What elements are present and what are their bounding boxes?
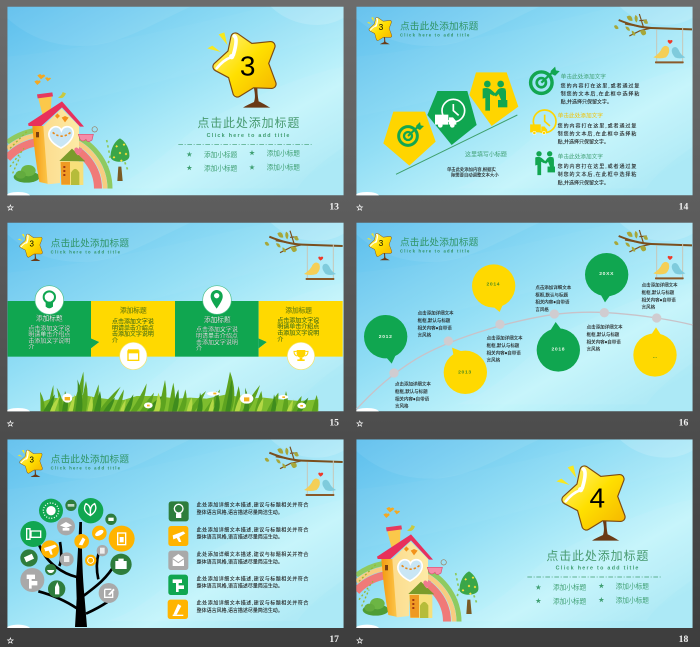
panel: slide 16 timeline	[355, 223, 693, 429]
icon: calendar	[120, 342, 147, 370]
caption: 单击此处添加内容,根据实	[447, 166, 496, 173]
bubble: 20XX	[585, 253, 628, 302]
footer	[7, 417, 339, 429]
caption: 这里填写小标题	[465, 150, 507, 158]
heading subtitle: Click here to add title	[400, 249, 470, 254]
decoration: branch and swing birds	[614, 230, 692, 279]
illustration: house with rainbow	[356, 507, 478, 622]
row text 3: 此处添加详细文本描述,建议与标题相关并符合	[197, 551, 308, 558]
text block 2: 框框,默认与标题	[418, 317, 451, 324]
column: green 3: 击添加文字说明	[196, 338, 238, 346]
item: target	[531, 67, 639, 105]
bubble: 2018	[537, 322, 580, 372]
sub-headings list: 添加小标题	[616, 581, 649, 590]
sub-headings list: 添加小标题	[553, 583, 587, 592]
item: delivery: 制您的文本后,在此框中选择粘	[558, 130, 636, 137]
decoration: branch and swing birds	[265, 231, 343, 280]
heading subtitle: Click here to add title	[51, 249, 121, 254]
sub-headings list: 添加小标题	[553, 596, 587, 605]
row text 4: 此处添加详细文本描述,建议与标题相关并符合	[197, 575, 308, 582]
footer: 17	[329, 634, 339, 645]
footer: ☆	[7, 635, 14, 645]
sub-headings list: ★	[598, 597, 604, 604]
pentagon: handshake	[469, 72, 518, 126]
sub-headings list	[186, 148, 300, 172]
column: green 3: 添加标题	[204, 315, 231, 324]
panel: slide 14 three pentagons	[355, 7, 693, 213]
timeline nodes	[389, 308, 661, 378]
bubble: 2014	[472, 264, 515, 312]
item: handshake: 贴,并选择只保留文字。	[558, 179, 609, 186]
slide 16 background	[355, 223, 693, 416]
sub-headings list	[535, 581, 649, 605]
column: green 1: 介	[28, 344, 34, 351]
item: delivery	[530, 110, 636, 145]
column: yellow 2: 介	[112, 337, 118, 344]
item: target: 您的内容打在这里,或者通过复	[561, 82, 639, 89]
row text 4	[197, 575, 308, 590]
text block 4: 相关内容●自带语	[535, 299, 570, 306]
header number: 3	[379, 239, 384, 248]
footer: ☆	[356, 203, 363, 213]
divider	[527, 576, 662, 578]
bubble: 20XX: 20XX	[599, 271, 614, 277]
panel: slide 17 icon tree	[6, 439, 344, 645]
icon: star tree	[556, 465, 621, 541]
row text 2: 整体语言风格,语言描述尽量简洁生动。	[197, 534, 283, 541]
column: yellow 4	[259, 301, 343, 357]
sub-headings list: ★	[535, 584, 541, 591]
text block 2: 相关内容●自带语	[418, 324, 452, 331]
column: green 1: 明请单击介绍点	[28, 331, 70, 339]
icon: star tree	[207, 32, 272, 108]
tree icon circles	[20, 498, 135, 603]
column: yellow 2: 明请单击介绍点	[112, 324, 154, 332]
bubble: 2013	[444, 348, 487, 394]
text block 2: 点击添加详细文本	[418, 309, 454, 316]
icon: light bulb	[35, 286, 64, 314]
item: target: 制您的文本后,在此框中选择粘	[561, 90, 639, 97]
item: handshake: 您的内容打在这里,或者通过复	[558, 163, 636, 170]
column: yellow 4: 击添加文字说明	[277, 329, 319, 337]
text block 1: 点击添加详细文本	[395, 381, 431, 388]
text block 4: 点击添加详细文本	[535, 284, 572, 291]
text block 4	[535, 284, 572, 313]
row icon 5	[168, 600, 188, 619]
heading subtitle: Click here to add title	[51, 465, 121, 470]
section number 3: 3	[240, 50, 255, 81]
text block 6: 点击添加详细文本	[642, 282, 678, 289]
row text 3	[197, 551, 308, 565]
slide 17 background	[6, 439, 344, 633]
panel: slide 13 section cover	[6, 7, 344, 213]
column: yellow 4: 明请单击介绍点	[277, 323, 319, 331]
column: green 1: 点击添加文字说	[28, 325, 70, 333]
heading subtitle: Click here to add title	[400, 33, 470, 38]
column: yellow 2	[91, 301, 175, 357]
text block 3: 框框,默认与标题	[487, 342, 520, 349]
text block 3: 点击添加详细文本	[487, 335, 523, 342]
sub-headings list: ★	[535, 598, 541, 605]
text block 2	[418, 309, 454, 338]
diagonal line	[396, 115, 517, 174]
item: target: 单击此处添加文字	[561, 72, 606, 80]
footer: 14	[679, 201, 689, 212]
column: green 3: 明请单击介绍点	[196, 332, 238, 340]
text block 3	[487, 335, 523, 363]
item: delivery: 单击此处添加文字	[558, 112, 603, 120]
footer	[356, 634, 689, 645]
header star icon	[367, 233, 390, 260]
footer: 13	[329, 201, 339, 212]
footer: ☆	[356, 419, 363, 429]
decoration: branch and swing birds	[614, 14, 692, 63]
illustration: grass	[40, 372, 318, 411]
header star icon	[18, 450, 41, 477]
text block 1: 相关内容●自带语	[395, 395, 430, 402]
divider	[178, 143, 313, 145]
item: handshake	[535, 151, 636, 186]
title: 点击此处添加标题	[546, 549, 648, 563]
subtitle: Click here to add title	[207, 133, 289, 139]
footer	[7, 634, 339, 645]
row icon 2	[168, 526, 188, 546]
bubble: 2012	[364, 315, 407, 364]
bubble: 2014: 2014	[486, 282, 500, 288]
teal pointer	[175, 307, 183, 320]
column: yellow 4: 添加标题	[285, 305, 312, 314]
item: delivery: 贴,并选择只保留文字。	[558, 138, 609, 145]
heading: 点击此处添加标题	[400, 237, 479, 249]
footer: ☆	[7, 419, 14, 429]
text block 6: 言风格	[642, 304, 656, 311]
row text 1	[197, 502, 308, 516]
text block 2: 言风格	[418, 331, 432, 338]
column: yellow 4: 点击添加文字说	[277, 316, 319, 324]
sub-headings list: ★	[249, 164, 255, 171]
footer	[356, 201, 689, 213]
text block 1	[395, 381, 431, 410]
slide 15 background	[6, 223, 344, 416]
sub-headings list: 添加小标题	[204, 163, 238, 172]
bubble: 2018: 2018	[551, 346, 565, 352]
icon: location pin	[203, 286, 231, 314]
header number: 3	[29, 240, 34, 249]
caption: 际需要自动调整文本大小	[451, 171, 499, 178]
row text 1: 整体语言风格,语言描述尽量简洁生动。	[197, 509, 283, 516]
bubble: 2012: 2012	[379, 334, 393, 340]
heading: 点击此处添加标题	[51, 237, 129, 249]
column: green 1: 添加标题	[36, 313, 63, 322]
footer: 16	[679, 417, 689, 428]
header star icon	[367, 17, 390, 44]
column: green 3	[175, 301, 267, 357]
timeline arc	[356, 312, 693, 409]
slide 13 background	[6, 7, 344, 200]
footer: ☆	[356, 635, 363, 645]
sub-headings list: ★	[598, 583, 604, 590]
column: yellow 4: 介	[277, 336, 283, 343]
row text 5: 此处添加详细文本描述,建议与标题相关并符合	[197, 600, 308, 607]
row text 5: 整体语言风格,语言描述尽量简洁生动。	[197, 607, 283, 614]
text block 6: 框框,默认与标题	[642, 289, 675, 296]
item: handshake: 单击此处添加文字	[558, 153, 603, 161]
column: yellow 2: 点击添加文字说	[112, 318, 154, 326]
column: green 1: 击添加文字说明	[28, 337, 70, 345]
footer: ☆	[7, 203, 14, 213]
slide 14 background	[355, 7, 693, 200]
sub-headings list: ★	[186, 165, 192, 172]
text block 6	[642, 282, 678, 311]
heading: 点击此处添加标题	[400, 21, 479, 33]
caption	[447, 150, 507, 178]
text block 5: 点击添加详细文本	[587, 324, 623, 331]
illustration: house with rainbow	[7, 74, 129, 189]
sub-headings list: 添加小标题	[616, 595, 649, 604]
text block 4: 言风格	[535, 306, 549, 313]
decoration: branch and swing birds	[265, 447, 343, 496]
section number 4: 4	[590, 482, 605, 513]
pentagon: target	[383, 112, 436, 166]
header number: 3	[29, 456, 34, 465]
title: 点击此处添加标题	[197, 116, 299, 130]
text block 3: 言风格	[487, 356, 501, 363]
panel: slide 18 section cover	[355, 439, 693, 645]
column: yellow 2: 添加标题	[120, 306, 147, 315]
text block 5	[587, 324, 623, 353]
icon: trophy	[287, 342, 315, 370]
text block 1: 言风格	[395, 403, 409, 410]
column: green 1	[8, 301, 99, 357]
text block 6: 相关内容●自带语	[642, 296, 676, 303]
tree trunk and branches	[38, 522, 116, 627]
row icon 3	[168, 551, 188, 570]
footer	[7, 201, 339, 213]
row text 2	[197, 526, 308, 541]
sub-headings list: 添加小标题	[204, 150, 238, 159]
column: green 3: 介	[196, 346, 202, 353]
column: green 3: 点击添加文字说	[196, 326, 238, 334]
sub-headings list: ★	[186, 152, 192, 159]
heading: 点击此处添加标题	[51, 453, 129, 465]
item: target: 贴,并选择只保留文字。	[561, 98, 612, 105]
sub-headings list: 添加小标题	[267, 163, 300, 172]
slide 18 background	[355, 439, 693, 633]
text block 5: 言风格	[587, 346, 601, 353]
text block 3: 相关内容●自带语	[487, 349, 521, 356]
header star icon	[18, 234, 41, 261]
row text 3: 整体语言风格,语言描述尽量简洁生动。	[197, 558, 283, 565]
footer: 15	[329, 417, 339, 428]
panel: slide 15 four column band	[6, 223, 344, 429]
bubble: 2013: 2013	[458, 370, 472, 376]
row text 5	[197, 600, 308, 614]
row text 4: 整体语言风格,语言描述尽量简洁生动。	[197, 583, 283, 590]
text block 4: 框框,默认与标题	[535, 291, 568, 298]
row text 2: 此处添加详细文本描述,建议与标题相关并符合	[197, 526, 308, 533]
bubble: ...: ...	[653, 354, 658, 360]
sub-headings list: 添加小标题	[267, 148, 300, 157]
subtitle: Click here to add title	[556, 566, 638, 572]
row icon 4	[168, 575, 188, 595]
header number: 3	[379, 23, 384, 32]
text block 5: 相关内容●自带语	[587, 338, 621, 345]
row text 1: 此处添加详细文本描述,建议与标题相关并符合	[197, 502, 308, 509]
column: yellow 2: 击添加文字说明	[112, 330, 154, 338]
sub-headings list: ★	[249, 150, 255, 157]
row icon 1	[169, 501, 189, 521]
text block 5: 框框,默认与标题	[587, 331, 620, 338]
footer: 18	[679, 634, 689, 645]
text block 1: 框框,默认与标题	[395, 388, 428, 395]
footer	[356, 417, 689, 429]
bubble: ...	[633, 327, 677, 377]
item: handshake: 制您的文本后,在此框中选择粘	[558, 171, 636, 178]
item: delivery: 您的内容打在这里,或者通过复	[558, 123, 636, 130]
pentagon: delivery clock	[427, 91, 477, 145]
